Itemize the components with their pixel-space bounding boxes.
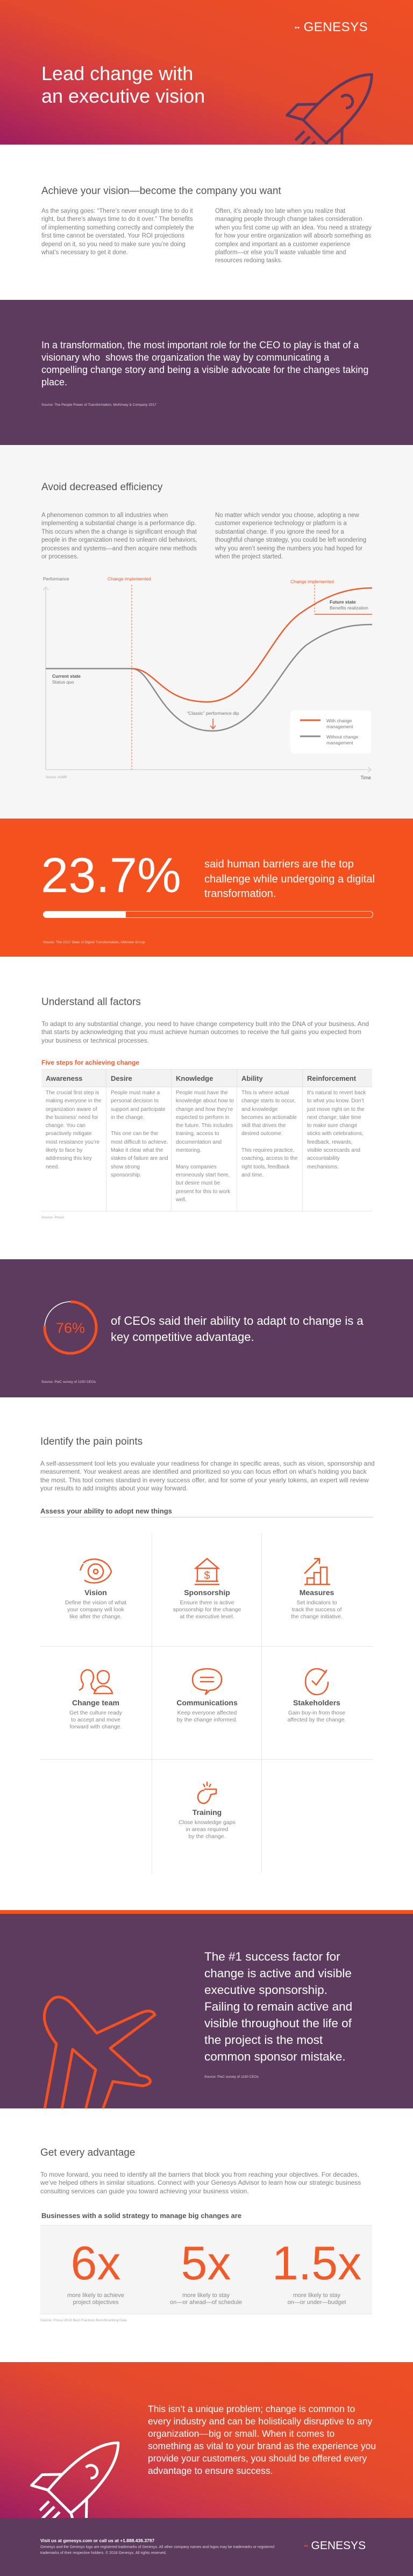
- card: training: Training: [193, 1808, 222, 1817]
- card: measures: [291, 1558, 343, 1620]
- text: To move forward, you need to identify all the barriers that block you from reaching your objectives. For decades, we’ve helped others in similar situations. Connect with your Genesys Advisor to learn how our strategic business consulting services can guide you toward achieving your business vision.: [40, 2171, 361, 2195]
- logo: •• GENESYS: [304, 2539, 366, 2552]
- column: desire: [111, 1074, 168, 1178]
- footer: [0, 2518, 413, 2576]
- subheading: Five steps for achieving change: [41, 1059, 139, 1066]
- source: Source: The People Power of Transformation, McKinsey & Company 2017: [41, 403, 156, 407]
- column: awareness: The crucial first step is making everyone in the organization aware of the business’ need for change. You can proactively mitigate most resistance you’re likely to face by addressing this key need.: [46, 1090, 101, 1170]
- source: Source: Prosci: [41, 1216, 64, 1219]
- icon: rocket: [286, 73, 373, 145]
- stat: 6x: 6x: [71, 2236, 120, 2290]
- source and time label: Source: AOMP: [46, 776, 67, 779]
- labels: Benefits realization: [330, 605, 368, 611]
- stat: 6x: [67, 2236, 124, 2306]
- card: sponsorship: Ensure there is active: [180, 1599, 234, 1606]
- stats panel: [40, 2225, 372, 2314]
- current state line: [46, 668, 132, 669]
- card: measures: the change initiative.: [291, 1613, 343, 1620]
- labels: [43, 576, 368, 716]
- axes: [43, 587, 371, 772]
- card: change team: Change team: [72, 1698, 119, 1707]
- card: vision: your company will look: [67, 1606, 124, 1613]
- section: avoid decreased efficiency: [0, 445, 413, 819]
- big number: 23.7%: [41, 848, 181, 903]
- progress bar: [43, 911, 373, 918]
- column: ability: This requires practice, coaching, access to the right tools, feedback and time.: [241, 1147, 298, 1178]
- card: communications: [176, 1668, 238, 1723]
- stat: 5x: [170, 2236, 242, 2306]
- arrow: dip: [210, 719, 216, 729]
- column: desire: This one can be the most difficult to achieve. Make it clear what the stakes of failure are and show strong sponsorship.: [111, 1131, 168, 1178]
- labels: “Classic” performance dip: [187, 711, 239, 716]
- labels: Change implemented: [290, 579, 334, 584]
- column: awareness: Awareness: [46, 1074, 82, 1082]
- legend: [290, 711, 371, 754]
- labels: Future state: [330, 599, 356, 605]
- stat: 1.5x: more likely to stay: [293, 2292, 340, 2299]
- card: training: Close knowledge gaps: [179, 1819, 236, 1826]
- column: desire: People must make a personal decision to support and participate in the change.: [111, 1090, 166, 1121]
- heading: Achieve your vision—become the company you want: [41, 185, 281, 197]
- icon: whistle: [197, 1782, 217, 1804]
- column: reinforcement: Reinforcement: [307, 1074, 356, 1082]
- card: stakeholders: [287, 1668, 346, 1723]
- logo: •• GENESYS: [295, 20, 368, 34]
- source: Source: PwC survey of 1150 CEOs: [204, 2075, 259, 2079]
- stat text: of CEOs said their ability to adapt to change is a key competitive advantage.: [111, 1314, 364, 1344]
- curve: with change management: [132, 588, 372, 702]
- stat: 6x: more likely to achieve: [67, 2292, 124, 2299]
- card: measures: Measures: [300, 1588, 334, 1597]
- card: communications: by the change informed.: [177, 1717, 237, 1723]
- card: communications: Keep everyone affected: [177, 1710, 237, 1716]
- icon: speech bubble: [191, 1668, 223, 1695]
- icon: eye: [80, 1559, 112, 1583]
- card: communications: Communications: [176, 1698, 238, 1707]
- quote band: #1 success factor: [0, 1910, 413, 2108]
- text: right: No matter which vendor you choose, adopting a new customer experience technology or platform is a substantial change. If you ignore the need for a thoughtful change strategy, you could be left wondering why you aren’t seeing the numbers you had hoped for when the project started.: [215, 512, 366, 560]
- closing text: This isn’t a unique problem; change is common to every industry and can be holistically disruptive to any organization—big or small. When it comes to something as vital to your brand as the experience you provide your customers, you should be offered every advantage to ensure success.: [148, 2403, 376, 2476]
- card: stakeholders: affected by the change.: [287, 1717, 346, 1723]
- column: reinforcement: It’s natural to revert back to what you know. Don’t just move right on to the next change; take time to make sure change sticks with celebrations, feedback, rewards, visible scorecards and accountability mechanisms.: [307, 1090, 366, 1170]
- icon: check circle: [304, 1668, 329, 1695]
- legend: management: [326, 724, 353, 729]
- column: ability: [241, 1074, 298, 1178]
- subheading: Businesses with a solid strategy to manage big changes are: [41, 2212, 241, 2220]
- quote band: CEO role: [0, 300, 413, 445]
- text: left column: As the saying goes: “There’s never enough time to do it right, but there’s always time to do it over.” The benefits of implementing something correctly and completely the first time cannot be overstated. Your ROI projections depend on it, so you need to make sure you’re doing what’s necessary to get it done.: [41, 208, 194, 256]
- contact text: [40, 2538, 274, 2555]
- card: change team: Get the culture ready: [69, 1710, 122, 1716]
- column: knowledge: People must have the knowledge about how to change and how they’re expected to perform in the future. This includes training, access to documentation and mentoring.: [176, 1090, 234, 1153]
- subheading: Assess your ability to adopt new things: [40, 1507, 172, 1515]
- card: change team: [69, 1669, 122, 1730]
- closing banner: [0, 2362, 413, 2518]
- stat: 5x: on—or ahead—of schedule: [170, 2299, 242, 2306]
- section: achieve your vision: [41, 185, 372, 264]
- column: ability: Ability: [241, 1074, 263, 1082]
- labels: Change implemented: [108, 576, 151, 582]
- card: stakeholders: Gain buy-in from those: [288, 1710, 345, 1716]
- card: vision: Define the vision of what: [65, 1599, 126, 1606]
- curve: without change management: [132, 625, 372, 731]
- donut chart: 76%: [56, 1320, 85, 1336]
- source: Source: Prosci 2018 Best Practices Benchmarking Data: [40, 2319, 127, 2322]
- icon: airplane: [43, 1996, 156, 2108]
- table: five steps: [41, 1069, 372, 1211]
- card: change team: to accept and move: [71, 1717, 120, 1723]
- card: training: by the change.: [189, 1833, 225, 1840]
- card: vision: Vision: [84, 1588, 107, 1597]
- labels: Status quo: [52, 679, 74, 685]
- column: ability: This is where actual change starts to occur, and knowledge becomes an actionable skill that drives the desired outcome.: [241, 1090, 297, 1137]
- section: identify the pain points: [40, 1436, 375, 1873]
- card: vision: [65, 1559, 127, 1620]
- card: training: [179, 1782, 236, 1840]
- stat band: 23.7%: [0, 819, 413, 957]
- labels: Current state: [52, 673, 81, 679]
- icon: people: [79, 1669, 113, 1694]
- card: vision: like after the change.: [69, 1613, 122, 1620]
- title: an executive vision: [41, 85, 205, 107]
- legend: Without change: [326, 734, 358, 740]
- legend: With change: [326, 718, 352, 723]
- stat: 1.5x: 1.5x: [272, 2236, 361, 2290]
- heading: Get every advantage: [40, 2147, 135, 2158]
- column: desire: Desire: [111, 1074, 132, 1082]
- header banner: [0, 0, 413, 145]
- stat: 5x: 5x: [181, 2236, 231, 2290]
- heading: Understand all factors: [41, 996, 141, 1008]
- stat: 5x: more likely to stay: [182, 2292, 230, 2299]
- card: measures: Set indicators to: [296, 1599, 337, 1606]
- legend: management: [326, 740, 353, 745]
- stat: 1.5x: on—or under—budget: [288, 2299, 346, 2306]
- icon: bank: [194, 1558, 220, 1585]
- column: knowledge: [176, 1074, 234, 1203]
- heading: Identify the pain points: [40, 1436, 143, 1447]
- card: sponsorship: [173, 1558, 241, 1620]
- column: knowledge: Many companies erroneously start here, but desire must be present for this to work well.: [176, 1164, 230, 1203]
- text: left: A phenomenon common to all industries when implementing a substantial change is a performance dip. This occurs when the a change is significant enough that people in the organization need to unlearn old behaviors, processes and systems—and then acquire new methods or processes.: [41, 512, 197, 560]
- source: Source: The 2017 State of Digital Transformation, Altimeter Group: [43, 941, 145, 944]
- icon: chart arrow: [304, 1558, 330, 1585]
- card: change team: forward with change.: [70, 1724, 122, 1730]
- icon: bank: $: [204, 1570, 210, 1582]
- card: sponsorship: Sponsorship: [184, 1588, 230, 1597]
- quote text: In a transformation, the most important role for the CEO to play is that of a visionary who shows the organization the way by communicating a compelling change story and being a visible advocate for the changes taking place.: [41, 340, 368, 388]
- quote text: The #1 success factor for change is active and visible executive sponsorship. Failing to remain active and visible throughout the life of the project is the most common sponsor mistake.: [204, 1950, 352, 2063]
- dashed markers: [132, 585, 372, 770]
- heading: Avoid decreased efficiency: [41, 482, 162, 493]
- stat text: said human barriers are the top challenge while undergoing a digital transformation.: [204, 858, 375, 900]
- contact text: Genesys and the Genesys logo are registered trademarks of Genesys. All other company names and logos may be trademarks or registered trademarks of their respective holders. © 2018 Genesys. All rights reserved.: [40, 2545, 274, 2555]
- text: right column: Often, it’s already too late when you realize that managing people through change takes consideration when you first come up with an idea. You need a strategy for how your entire organization will absorb something as complex and important as a customer experience platform—or else you’ll waste valuable time and resources redoing tasks.: [215, 208, 372, 264]
- column: knowledge: Knowledge: [176, 1074, 213, 1082]
- stat: 6x: project objectives: [73, 2299, 118, 2306]
- card: sponsorship: sponsorship for the change: [173, 1606, 241, 1613]
- stat band: 76%: [0, 1259, 413, 1397]
- intro text: A self-assessment tool lets you evaluate your readiness for change in specific areas, such as vision, sponsorship and measurement. Your weakest areas are identified and prioritized so you can focus effort on what’s holding you back the most. This tool comes standard in every success offer, and for some of your yearly tokens, an expert will review your results to add insights about your way forward.: [40, 1460, 375, 1492]
- title: Lead change with: [41, 62, 193, 84]
- card: training: in areas required: [186, 1826, 228, 1833]
- intro text: To adapt to any substantial change, you need to have change competency built into the DNA of your business. And that starts by acknowledging that you must achieve human outcomes to receive the full gains you expected from your business or technical processes.: [41, 1020, 369, 1044]
- source: Source: PwC survey of 1150 CEOs: [41, 1380, 96, 1384]
- chart: performance dip: [43, 576, 372, 780]
- title: [41, 62, 205, 107]
- card: measures: track the success of: [292, 1606, 341, 1613]
- labels: Performance: [43, 576, 69, 582]
- donut chart: [43, 1301, 98, 1354]
- section: get every advantage: [40, 2147, 372, 2322]
- contact text: Visit us at genesys.com or call us at +1.888.436.3797: [40, 2538, 154, 2543]
- card: stakeholders: Stakeholders: [293, 1698, 340, 1707]
- section: understand all factors: [41, 996, 372, 1219]
- card: sponsorship: at the executive level.: [180, 1613, 234, 1620]
- icon: rocket white: [30, 2441, 119, 2518]
- chart: performance dip: Time: [360, 775, 371, 780]
